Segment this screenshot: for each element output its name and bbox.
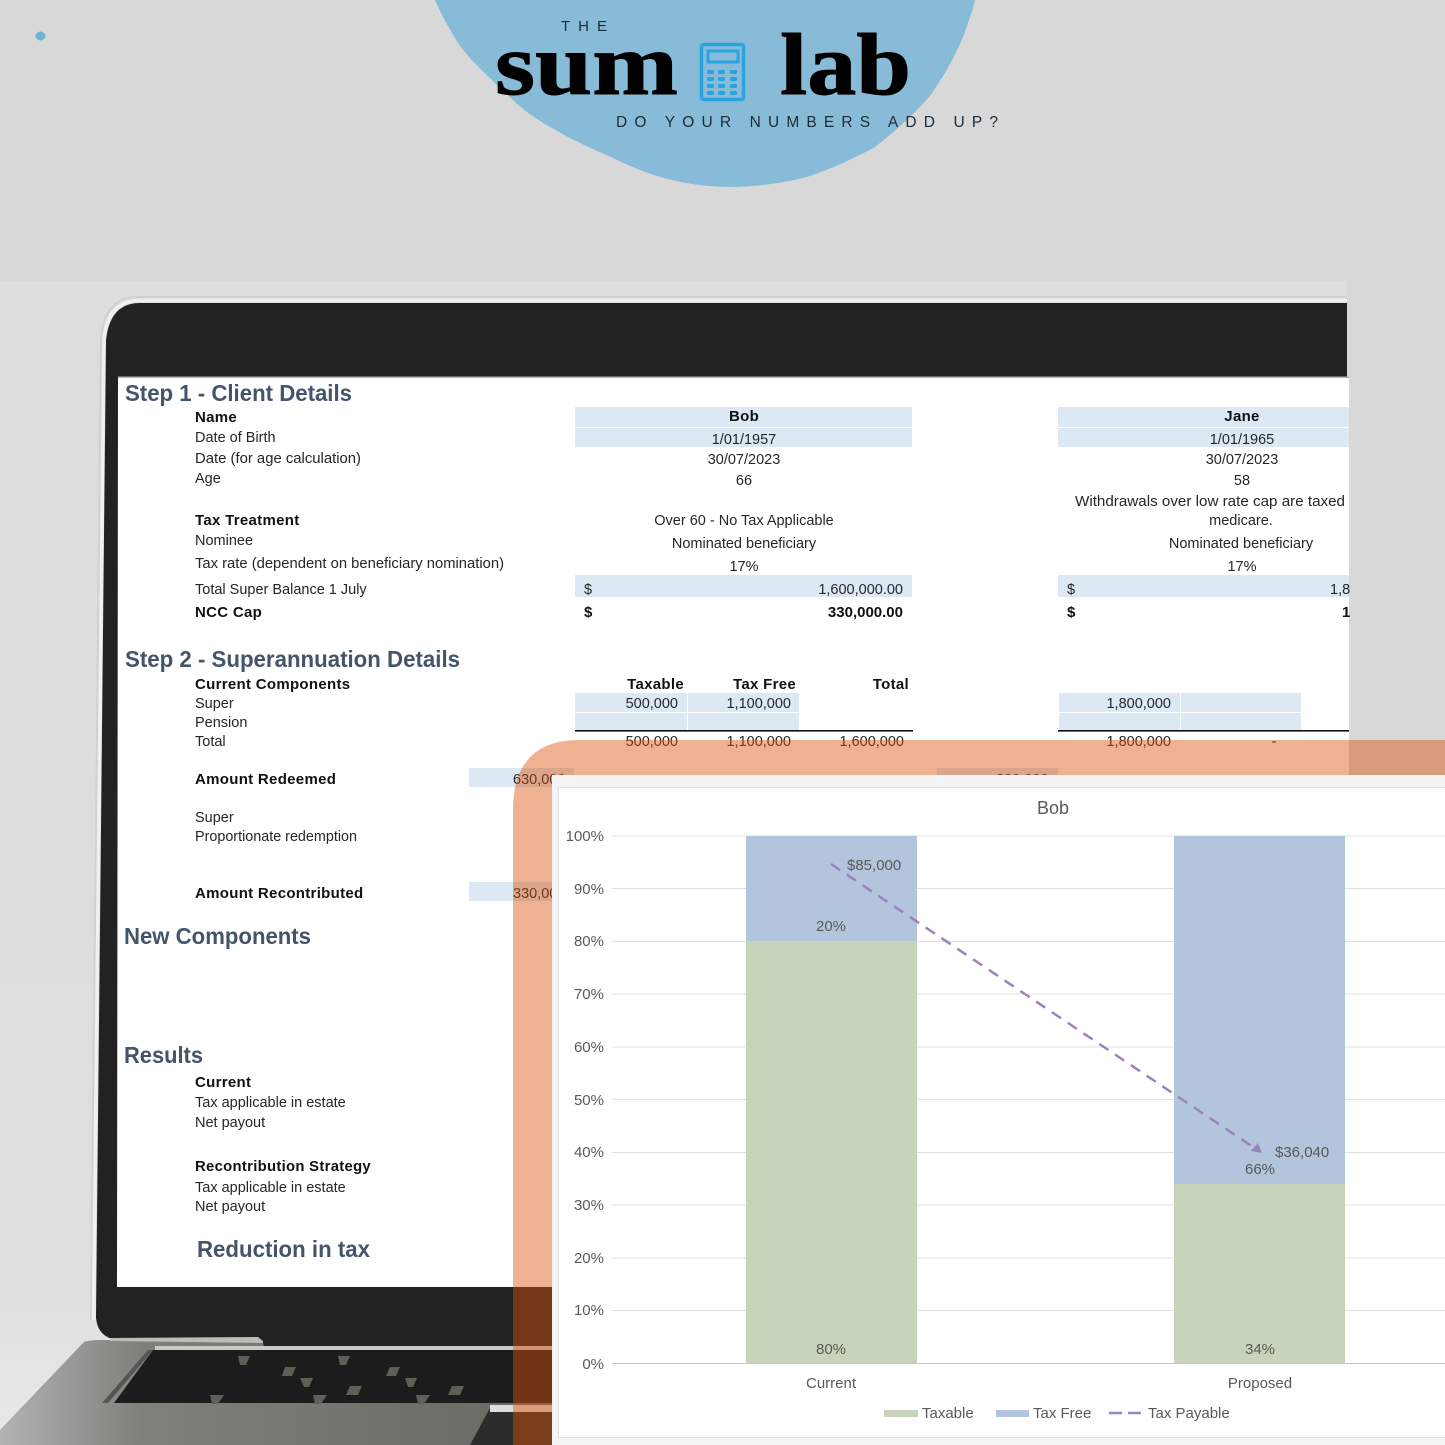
y axis gridlines and labels: 70%: [574, 986, 604, 1003]
components table: 1,800,000: [1106, 734, 1171, 750]
step 1 row labels: Tax Treatment: [195, 512, 300, 529]
Bob client column: 30/07/2023: [708, 452, 780, 468]
Jane client column: [1067, 408, 1351, 621]
y axis gridlines and labels: 80%: [574, 933, 604, 950]
bar: proposed: 66%: [1245, 1161, 1275, 1178]
step 1 heading: Step 1 - Client Details: [125, 380, 352, 406]
results labels: [195, 1074, 371, 1215]
tax payable line: $85,000: [847, 857, 901, 874]
results heading: Results: [124, 1042, 203, 1068]
Bob client column: 66: [736, 473, 752, 489]
Jane client column: $: [1067, 582, 1075, 598]
Jane client column: 1: [1342, 604, 1351, 621]
Jane client column: 30/07/2023: [1206, 452, 1278, 468]
Jane client column: 58: [1234, 473, 1250, 489]
Jane client column: 1,8: [1330, 582, 1350, 598]
results labels: Tax applicable in estate: [195, 1095, 346, 1111]
y axis gridlines and labels: 40%: [574, 1144, 604, 1161]
Bob client column: Bob: [729, 408, 759, 425]
bar: current: [746, 836, 917, 1392]
components table: 1,600,000: [839, 734, 904, 750]
bar: current: 80%: [816, 1341, 846, 1358]
step 2 labels: Super: [195, 696, 234, 712]
y axis gridlines and labels: 10%: [574, 1302, 604, 1319]
y axis gridlines and labels: [566, 828, 1445, 1373]
components table: Taxable: [627, 676, 684, 693]
step 1 row labels: Total Super Balance 1 July: [195, 582, 367, 598]
Jane client column: 17%: [1227, 559, 1257, 575]
step 2 labels: Current Components: [195, 676, 350, 693]
results labels: Recontribution Strategy: [195, 1158, 371, 1175]
Bob client column: 330,000.00: [828, 604, 903, 621]
results labels: Current: [195, 1074, 251, 1091]
components table: 630,000: [513, 772, 565, 788]
step 1 row labels: Date (for age calculation): [195, 451, 361, 467]
logo: sum: sum: [495, 17, 678, 114]
bar: current: 20%: [816, 918, 846, 935]
new components heading: New Components: [124, 923, 311, 949]
y axis gridlines and labels: 50%: [574, 1092, 604, 1109]
step 2 labels: Amount Redeemed: [195, 771, 336, 788]
components table: 1,100,000: [726, 734, 791, 750]
decorative dot: [36, 32, 46, 40]
components table: 500,000: [626, 696, 678, 712]
components table: -: [1272, 734, 1277, 750]
legend: Tax Free: [1033, 1405, 1091, 1422]
step 2 labels: Super: [195, 810, 234, 826]
Jane client column: $: [1067, 604, 1076, 621]
icon: calculator: [702, 44, 744, 100]
y axis gridlines and labels: 100%: [566, 828, 604, 845]
legend: [884, 1405, 1230, 1422]
y axis gridlines and labels: 30%: [574, 1197, 604, 1214]
Bob client column: Nominated beneficiary: [672, 536, 817, 552]
bar: proposed: 34%: [1245, 1341, 1275, 1358]
logo blob: [435, 0, 975, 187]
chart card: [552, 775, 1445, 1445]
Bob client column: $: [584, 582, 592, 598]
legend: Taxable: [922, 1405, 974, 1422]
step 1 row labels: NCC Cap: [195, 604, 262, 621]
Jane client column: Nominated beneficiary: [1169, 536, 1314, 552]
results labels: Tax applicable in estate: [195, 1180, 346, 1196]
components table: 500,000: [626, 734, 678, 750]
y axis gridlines and labels: 60%: [574, 1039, 604, 1056]
components table: Total: [873, 676, 909, 693]
results labels: Net payout: [195, 1115, 265, 1131]
step 2 heading: Step 2 - Superannuation Details: [125, 646, 460, 672]
step 1 row labels: Nominee: [195, 533, 253, 549]
y axis gridlines and labels: 0%: [582, 1356, 604, 1373]
step 1 row labels: Date of Birth: [195, 430, 276, 446]
Jane client column: 1/01/1965: [1210, 432, 1274, 448]
chart title: Bob: [1037, 798, 1069, 818]
logo: the: THE: [561, 18, 607, 35]
step 2 labels: [195, 676, 364, 902]
spreadsheet screen: [117, 376, 1351, 1287]
y axis gridlines and labels: 20%: [574, 1250, 604, 1267]
components table: Tax Free: [733, 676, 796, 693]
step 2 labels: Proportionate redemption: [195, 829, 357, 845]
Jane client column: Withdrawals over low rate cap are taxed: [1075, 494, 1345, 510]
logo: tagline: DO YOUR NUMBERS ADD UP?: [616, 114, 998, 131]
bar: current: Current: [806, 1375, 857, 1392]
results labels: Net payout: [195, 1199, 265, 1215]
Jane client column: Jane: [1224, 408, 1260, 425]
step 2 labels: Amount Recontributed: [195, 885, 364, 902]
components table: 1,800,000: [1106, 696, 1171, 712]
Bob client column: $: [584, 604, 593, 621]
laptop photo: [0, 281, 1347, 1445]
tax payable line: [831, 857, 1329, 1161]
Jane client column: medicare.: [1209, 513, 1273, 529]
components table: 330,000: [513, 886, 565, 902]
step 2 labels: Pension: [195, 715, 247, 731]
legend: Tax Payable: [1148, 1405, 1230, 1422]
components table: 1,100,000: [726, 696, 791, 712]
step 2 labels: Total: [195, 734, 226, 750]
orange accent panel: [513, 740, 1445, 1445]
Bob client column: Over 60 - No Tax Applicable: [654, 513, 834, 529]
Bob client column: 17%: [729, 559, 759, 575]
components table: [513, 676, 1349, 902]
step 1 row labels: Name: [195, 409, 237, 426]
tax payable line: $36,040: [1275, 1144, 1329, 1161]
Bob client column: [584, 408, 903, 621]
Bob client column: 1/01/1957: [712, 432, 776, 448]
Bob client column: 1,600,000.00: [818, 582, 903, 598]
step 1 row labels: Age: [195, 471, 221, 487]
bar: proposed: [1174, 836, 1345, 1392]
y axis gridlines and labels: 90%: [574, 881, 604, 898]
components table: 890,000: [996, 772, 1048, 788]
logo: lab: lab: [780, 17, 911, 114]
bar: proposed: Proposed: [1228, 1375, 1292, 1392]
step 1 row labels: Tax rate (dependent on beneficiary nomination): [195, 556, 504, 572]
input cell shading: [469, 407, 1349, 901]
reduction in tax: Reduction in tax: [197, 1236, 370, 1262]
step 1 row labels: [195, 409, 504, 621]
